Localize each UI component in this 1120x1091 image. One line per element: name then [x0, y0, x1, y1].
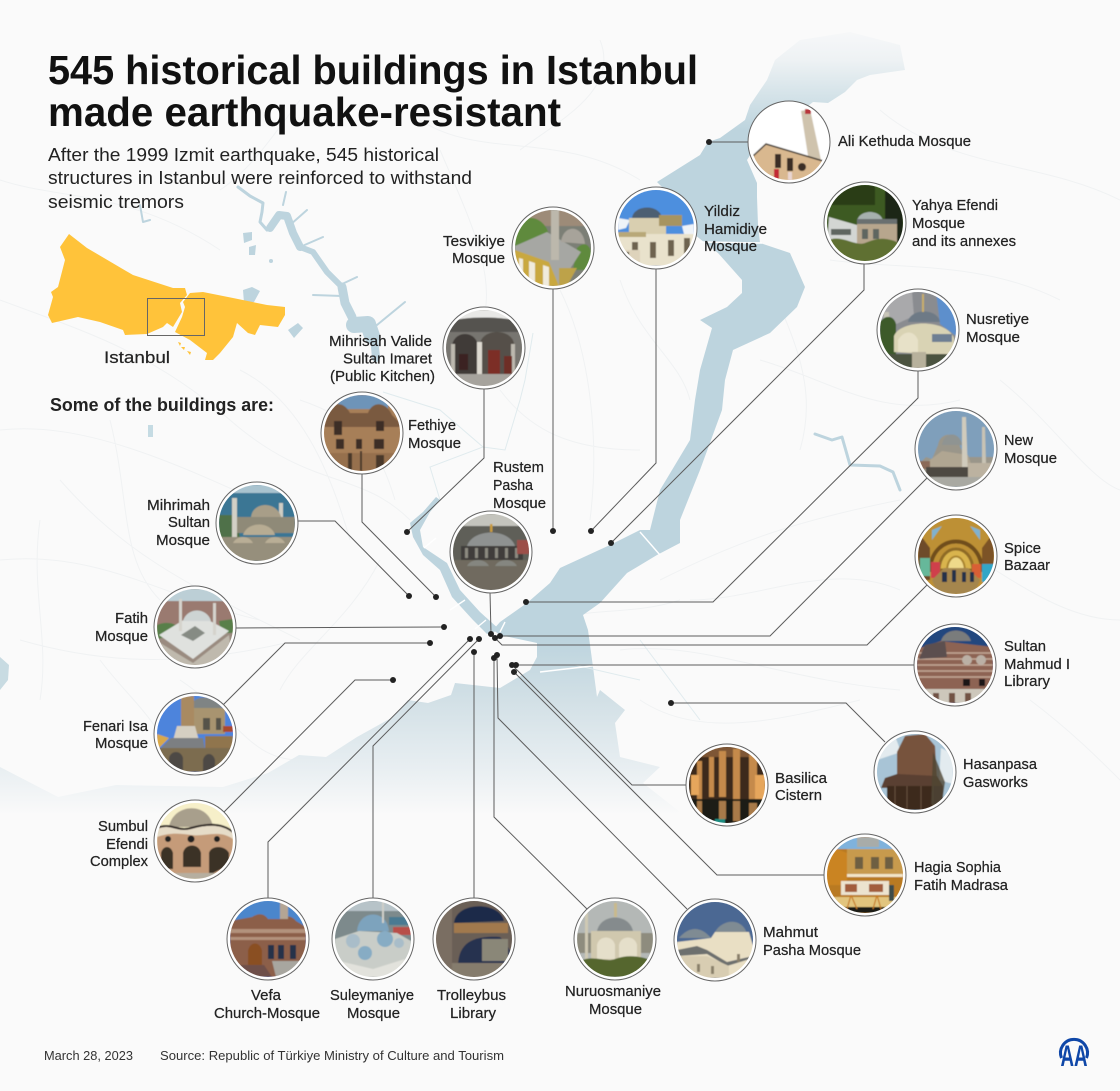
callout: Yildiz Hamidiye Mosque: Yildiz [704, 204, 740, 220]
callout: Trolleybus Library: Library [450, 1006, 497, 1022]
callout: Rustem Pasha Mosque: Pasha [493, 478, 534, 494]
footer: source: Source: Republic of Türkiye Ministry of Culture and Tourism [160, 1049, 504, 1063]
callout: Fenari Isa Mosque [83, 640, 433, 775]
callout: Vefa Church-Mosque [214, 636, 473, 1022]
callout: Hasanpasa Gasworks: Gasworks [963, 775, 1028, 791]
title [48, 47, 698, 135]
callout: Fatih Mosque: Fatih [115, 611, 148, 627]
callout: Hasanpasa Gasworks: Hasanpasa [963, 757, 1038, 773]
subtitle text [48, 144, 472, 212]
callout: Suleymaniye Mosque [330, 636, 482, 1022]
title: 545 historical buildings in Istanbul [48, 47, 698, 93]
callout: Sumbul Efendi Complex: Complex [90, 854, 149, 870]
locator map label: Istanbul [104, 348, 170, 367]
callout: Nusretiye Mosque [523, 289, 1029, 605]
callout: Nusretiye Mosque: Nusretiye [966, 312, 1029, 328]
callout: Sumbul Efendi Complex: Efendi [106, 837, 148, 853]
callout: Fethiye Mosque [321, 392, 461, 600]
callout: Basilica Cistern: Basilica [775, 771, 828, 787]
callout: Fenari Isa Mosque: Fenari Isa [83, 719, 149, 735]
callout: Rustem Pasha Mosque: Rustem [493, 460, 544, 476]
callout: Suleymaniye Mosque: Mosque [347, 1006, 400, 1022]
callout: Fenari Isa Mosque: Mosque [95, 736, 148, 752]
callout: Yildiz Hamidiye Mosque [588, 187, 767, 534]
callout: Mahmut Pasha Mosque: Mahmut [763, 925, 818, 941]
callout: Hagia Sophia Fatih Madrasa: Fatih Madrasa [914, 878, 1009, 894]
callout: Hagia Sophia Fatih Madrasa [511, 669, 1009, 916]
callout: Sumbul Efendi Complex [90, 677, 396, 882]
callout: Mihrimah Sultan Mosque: Mihrimah [147, 498, 210, 514]
subtitle text: structures in Istanbul were reinforced to withstand [48, 167, 472, 188]
callout: Hasanpasa Gasworks [668, 700, 1038, 813]
callout: Vefa Church-Mosque: Church-Mosque [214, 1006, 320, 1022]
subtitle text: After the 1999 Izmit earthquake, 545 historical [48, 144, 439, 165]
callout: Spice Bazaar [492, 515, 1050, 645]
callout: Sultan Mahmud I Library [513, 624, 1070, 706]
footer: date: March 28, 2023 [44, 1049, 133, 1063]
locator map: Istanbul province [48, 234, 285, 360]
title: made earthquake-resistant [48, 89, 561, 135]
callout: Mihrisah Valide Sultan Imaret: Sultan Imaret [343, 352, 432, 368]
callout: Fethiye Mosque: Mosque [408, 436, 461, 452]
icon: AA logo [1060, 1039, 1088, 1073]
callout: Rustem Pasha Mosque [450, 460, 546, 637]
callout: Spice Bazaar: Spice [1004, 541, 1041, 557]
callout: Nuruosmaniye Mosque: Nuruosmaniye [565, 984, 661, 1000]
callout: Mahmut Pasha Mosque [494, 652, 861, 981]
callout: Rustem Pasha Mosque: Mosque [493, 496, 546, 512]
callout: Fatih Mosque: Mosque [95, 629, 148, 645]
callout: Trolleybus Library: Trolleybus [437, 988, 506, 1004]
subtitle text: seismic tremors [48, 191, 184, 212]
callout: Yahya Efendi Mosque and its annexes [608, 182, 1016, 546]
callout: Yildiz Hamidiye Mosque: Hamidiye [704, 222, 767, 238]
callout: Yahya Efendi Mosque and its annexes: Mosque [912, 216, 965, 232]
callout: Mihrimah Sultan Mosque [147, 482, 412, 599]
callout: Ali Kethuda Mosque: Ali Kethuda Mosque [838, 134, 971, 150]
callout: Sultan Mahmud I Library: Sultan [1004, 639, 1046, 655]
callout: Tesvikiye Mosque: Tesvikiye [443, 234, 505, 250]
callout: Nuruosmaniye Mosque [491, 655, 661, 1018]
callout: Tesvikiye Mosque: Mosque [452, 251, 505, 267]
callout: Mihrisah Valide Sultan Imaret [329, 307, 525, 535]
callout: Fethiye Mosque: Fethiye [408, 418, 456, 434]
callout: Mihrisah Valide Sultan Imaret: Mihrisah Valide [329, 334, 432, 350]
callout: Ali Kethuda Mosque [706, 101, 971, 183]
callout: Basilica Cistern: Cistern [775, 788, 822, 804]
callout: New Mosque [497, 408, 1057, 639]
callout: Sultan Mahmud I Library: Mahmud I [1004, 657, 1070, 673]
callout: Hagia Sophia Fatih Madrasa: Hagia Sophia [914, 860, 1002, 876]
callout: New Mosque: Mosque [1004, 451, 1057, 467]
callout: Mahmut Pasha Mosque: Pasha Mosque [763, 943, 861, 959]
callout: Tesvikiye Mosque [443, 207, 594, 534]
callout: Mihrimah Sultan Mosque: Sultan [168, 515, 210, 531]
section heading: Some of the buildings are: [50, 395, 274, 415]
callout: Mihrimah Sultan Mosque: Mosque [156, 533, 210, 549]
callout: Vefa Church-Mosque: Vefa [251, 988, 282, 1004]
callout: Nusretiye Mosque: Mosque [966, 330, 1020, 346]
callout: Trolleybus Library [433, 649, 515, 1022]
callout: Sultan Mahmud I Library: Library [1004, 674, 1051, 690]
icon: AA logo: AA [1060, 1040, 1088, 1073]
callout: Sumbul Efendi Complex: Sumbul [98, 819, 148, 835]
map base: roads, water bodies [0, 32, 1120, 822]
callout: Yahya Efendi Mosque and its annexes: and its annexes [912, 234, 1016, 250]
callout: New Mosque: New [1004, 433, 1034, 449]
callout: Suleymaniye Mosque: Suleymaniye [330, 988, 414, 1004]
callout: Yahya Efendi Mosque and its annexes: Yahya Efendi [912, 198, 998, 214]
callout: Basilica Cistern [509, 662, 828, 826]
callout: Yildiz Hamidiye Mosque: Mosque [704, 239, 757, 255]
callout: Nuruosmaniye Mosque: Mosque [589, 1002, 642, 1018]
callout: Spice Bazaar: Bazaar [1004, 558, 1050, 574]
callout: Mihrisah Valide Sultan Imaret: (Public Kitchen) [330, 369, 435, 385]
callout: Fatih Mosque [95, 586, 447, 668]
